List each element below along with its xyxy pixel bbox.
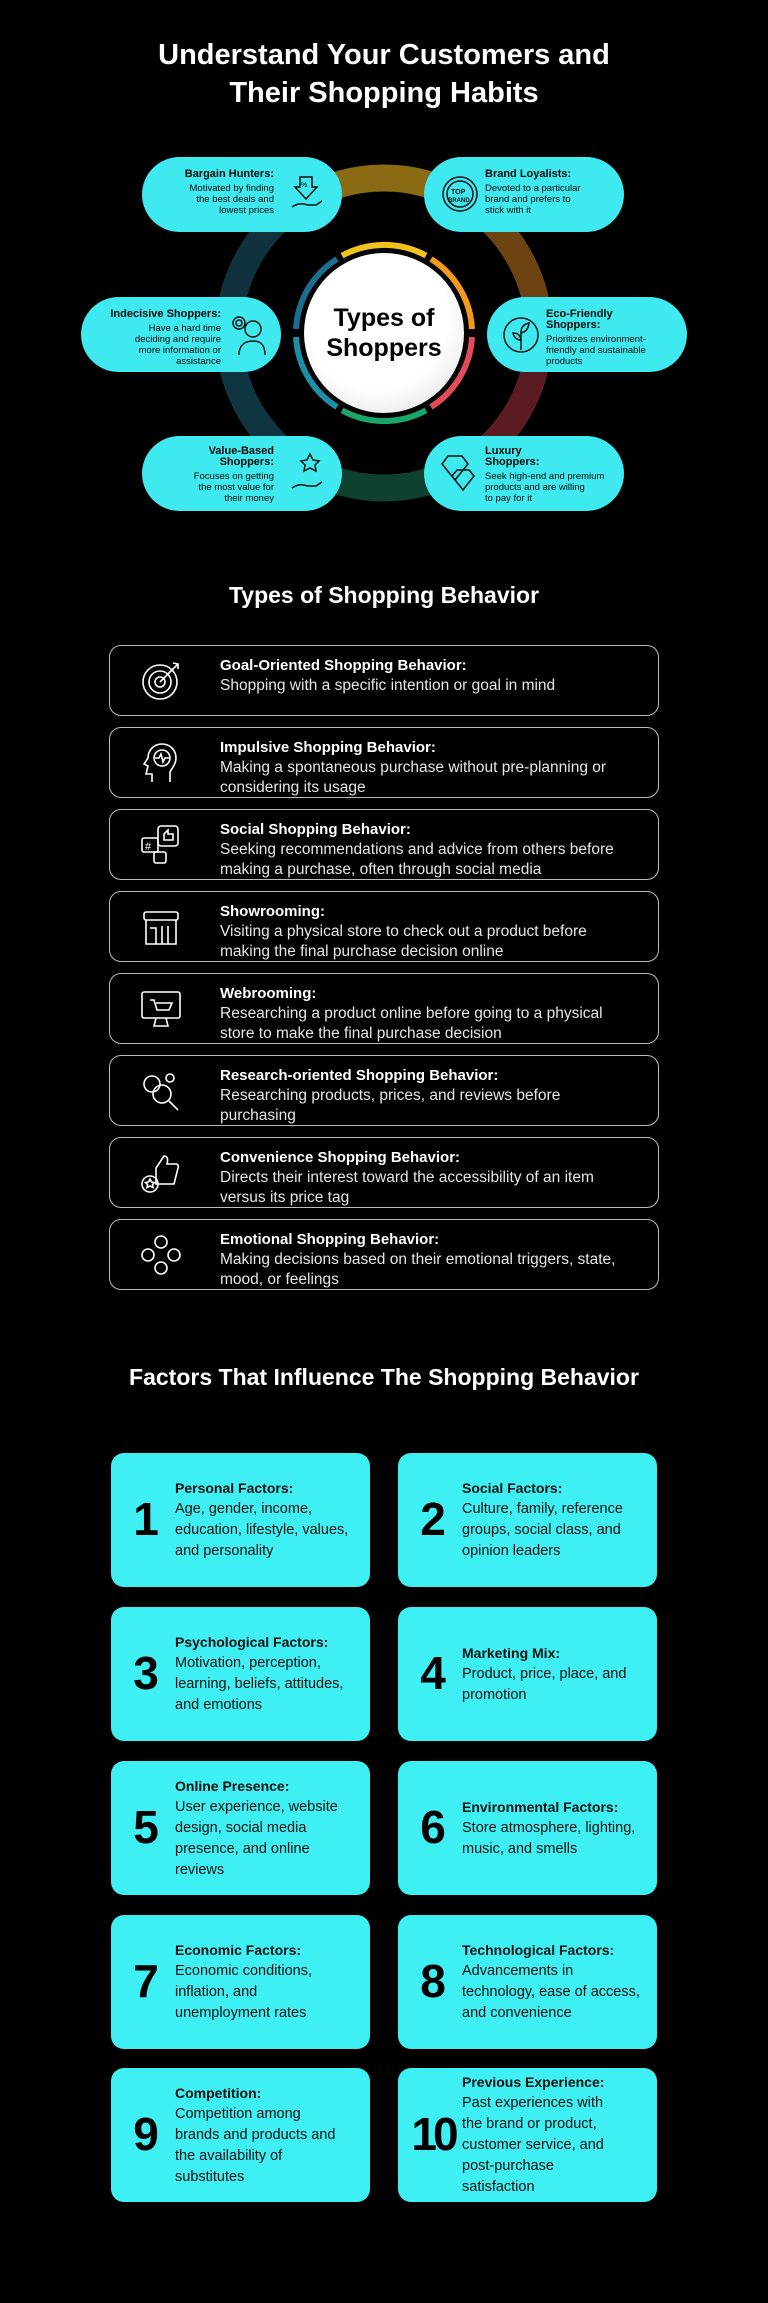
- card 8: 8: [420, 1955, 446, 2007]
- card 10: Past experiences with the brand or product, customer service, and post-purchase satisfaction: [462, 2095, 604, 2195]
- pill: indecisive shoppers: Have a hard time: [149, 323, 221, 334]
- card 8: Advancements in technology, ease of access, and convenience: [462, 1963, 640, 2021]
- title: [158, 39, 610, 109]
- pill: brand loyalists: TOP: [451, 189, 466, 196]
- box: convenience: Convenience Shopping Behavior:: [220, 1149, 460, 1166]
- card 4: [398, 1607, 657, 1741]
- card 4: Product, price, place, and promotion: [462, 1666, 626, 1702]
- pill: bargain hunters: %: [301, 182, 307, 189]
- card 1: Age, gender, income, education, lifestyle, values, and personality: [175, 1501, 348, 1559]
- card 2: 2: [420, 1493, 446, 1545]
- box: social: [109, 809, 659, 880]
- pill: luxury shoppers: Seek high-end and premium: [485, 471, 604, 482]
- pill: bargain hunters: the best deals and: [196, 194, 274, 205]
- box: social: Social Shopping Behavior:: [220, 821, 411, 838]
- center circle: [304, 253, 464, 413]
- card 6: Environmental Factors:: [462, 1798, 618, 1814]
- pill: bargain hunters: Motivated by finding: [190, 183, 274, 194]
- pill: brand loyalists: brand and prefers to: [485, 194, 571, 205]
- card 5: User experience, website design, social media presence, and online reviews: [175, 1798, 338, 1878]
- card 7: 7: [133, 1955, 159, 2007]
- box: goal-oriented: Goal-Oriented Shopping Behavior:: [220, 657, 467, 674]
- pill: indecisive shoppers: [81, 297, 281, 372]
- box: emotional: [109, 1219, 659, 1290]
- box: goal-oriented: Shopping with a specific intention or goal in mind: [220, 677, 555, 694]
- pill: value-based shoppers: Value-Based: [209, 445, 274, 457]
- card 7: Economic conditions, inflation, and unemployment rates: [175, 1963, 312, 2021]
- card 1: [111, 1453, 370, 1587]
- card 9: Competition among brands and products and the availability of substitutes: [175, 2106, 335, 2184]
- box: showrooming: Visiting a physical store to check out a product before making the final purchase decision online: [220, 923, 587, 960]
- pill: luxury shoppers: Luxury: [485, 445, 522, 457]
- center circle: Shoppers: [326, 334, 442, 362]
- box: goal-oriented: [109, 645, 659, 716]
- box: impulsive: [109, 727, 659, 798]
- diagram: types of shoppers: [81, 157, 687, 511]
- pill: luxury shoppers: products and are willing: [485, 482, 585, 493]
- card 7: Economic Factors:: [175, 1942, 301, 1958]
- card 5: 5: [133, 1801, 159, 1853]
- card 3: Motivation, perception, learning, beliefs, attitudes, and emotions: [175, 1655, 343, 1713]
- pill: brand loyalists: stick with it: [485, 205, 531, 216]
- pill: bargain hunters: lowest prices: [219, 205, 274, 216]
- box: emotional: Emotional Shopping Behavior:: [220, 1231, 439, 1248]
- center circle: Types of: [334, 304, 434, 332]
- pill: value-based shoppers: [142, 436, 342, 511]
- pill: indecisive shoppers: assistance: [176, 356, 221, 367]
- card 10: 10: [411, 2108, 455, 2160]
- card 6: 6: [420, 1801, 446, 1853]
- pill: value-based shoppers: the most value for: [198, 482, 274, 493]
- heading: types of shopping behavior: Types of Shopping Behavior: [229, 582, 539, 608]
- card 1: Personal Factors:: [175, 1480, 293, 1496]
- box: convenience: Directs their interest toward the accessibility of an item versus its price tag: [220, 1169, 594, 1206]
- card 6: [398, 1761, 657, 1895]
- card 10: Previous Experience:: [462, 2074, 604, 2090]
- pill: luxury shoppers: [424, 436, 624, 511]
- box: convenience: [109, 1137, 659, 1208]
- list: behavior boxes: [109, 645, 659, 1290]
- pill: bargain hunters: Bargain Hunters:: [185, 168, 274, 180]
- card 4: Marketing Mix:: [462, 1644, 560, 1660]
- pill: brand loyalists: Devoted to a particular: [485, 183, 581, 194]
- pill: luxury shoppers: Shoppers:: [485, 456, 539, 468]
- pill: brand loyalists: [424, 157, 624, 232]
- box: webrooming: [109, 973, 659, 1044]
- box: emotional: Making decisions based on their emotional triggers, state, mood, or feelings: [220, 1251, 615, 1288]
- pill: eco-friendly shoppers: Shoppers:: [546, 319, 600, 331]
- pill: eco-friendly shoppers: [487, 297, 687, 372]
- box: social: #: [145, 841, 152, 853]
- box: research-oriented: [109, 1055, 659, 1126]
- card 5: Online Presence:: [175, 1778, 289, 1794]
- card 10: [398, 2068, 657, 2202]
- pill: indecisive shoppers: Indecisive Shoppers:: [110, 308, 221, 320]
- title: Their Shopping Habits: [229, 77, 539, 109]
- card 9: [111, 2068, 370, 2202]
- card 5: [111, 1761, 370, 1895]
- box: research-oriented: Research-oriented Shopping Behavior:: [220, 1067, 498, 1084]
- pill: value-based shoppers: Shoppers:: [220, 456, 274, 468]
- box: webrooming: Researching a product online before going to a physical store to make the final purchase decision: [220, 1005, 603, 1042]
- card 7: [111, 1915, 370, 2049]
- pill: eco-friendly shoppers: products: [546, 356, 582, 367]
- card 9: Competition:: [175, 2084, 261, 2100]
- box: research-oriented: Researching products, prices, and reviews before purchasing: [220, 1087, 560, 1124]
- title: Understand Your Customers and: [158, 39, 610, 71]
- card 2: [398, 1453, 657, 1587]
- card 3: 3: [133, 1647, 159, 1699]
- box: webrooming: Webrooming:: [220, 985, 316, 1002]
- card 4: 4: [420, 1647, 446, 1699]
- card 1: 1: [133, 1493, 159, 1545]
- grid: factor cards: [111, 1453, 657, 2202]
- card 3: [111, 1607, 370, 1741]
- card 8: [398, 1915, 657, 2049]
- card 2: Social Factors:: [462, 1480, 562, 1496]
- card 8: Technological Factors:: [462, 1942, 614, 1958]
- pill: eco-friendly shoppers: Eco-Friendly: [546, 308, 613, 320]
- card 6: Store atmosphere, lighting, music, and smells: [462, 1820, 635, 1856]
- card 2: Culture, family, reference groups, social class, and opinion leaders: [462, 1501, 623, 1559]
- pill: value-based shoppers: Focuses on getting: [194, 471, 274, 482]
- pill: indecisive shoppers: deciding and require: [135, 334, 221, 345]
- pill: eco-friendly shoppers: friendly and sustainable: [546, 345, 646, 356]
- box: impulsive: Impulsive Shopping Behavior:: [220, 739, 436, 756]
- card 9: 9: [133, 2108, 159, 2160]
- pill: bargain hunters: [142, 157, 342, 232]
- box: showrooming: [109, 891, 659, 962]
- box: showrooming: Showrooming:: [220, 903, 325, 920]
- pill: luxury shoppers: to pay for it: [485, 493, 532, 504]
- card 3: Psychological Factors:: [175, 1634, 328, 1650]
- box: social: Seeking recommendations and advice from others before making a purchase, often through social media: [220, 841, 614, 878]
- pill: value-based shoppers: their money: [224, 493, 274, 504]
- heading: factors: Factors That Influence The Shopping Behavior: [129, 1364, 639, 1390]
- pill: indecisive shoppers: more information or: [139, 345, 221, 356]
- pill: brand loyalists: Brand Loyalists:: [485, 168, 571, 180]
- pill: eco-friendly shoppers: Prioritizes environment-: [546, 334, 646, 345]
- pill: brand loyalists: BRAND: [448, 198, 470, 204]
- box: impulsive: Making a spontaneous purchase without pre-planning or considering its usage: [220, 759, 606, 796]
